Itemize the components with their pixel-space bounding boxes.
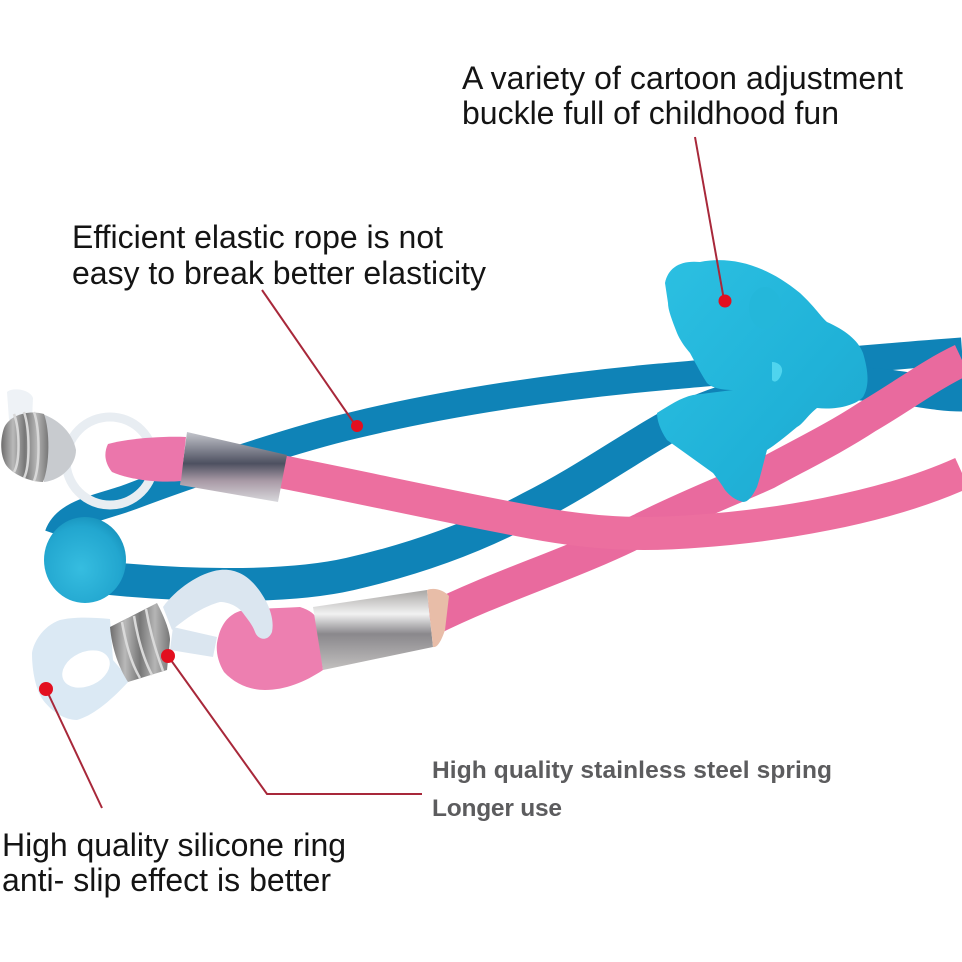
metal tube, lower: [313, 590, 433, 670]
steel spring, upper: [1, 389, 76, 482]
callout text: stainless steel spring: [432, 757, 832, 822]
pink rope end, upper: [105, 437, 186, 482]
callout text: stainless steel spring: High quality stainless steel spring: [432, 757, 832, 784]
leader line: elastic rope: [262, 290, 363, 432]
blue elastic rope, upper strand: [58, 351, 962, 535]
silicone ring hole: [56, 643, 116, 695]
turquoise bead: [44, 517, 126, 603]
dolphin adjustment buckle: [657, 260, 868, 502]
blue elastic rope, lower strand: [95, 384, 962, 585]
dolphin eye: [749, 287, 781, 329]
crimp band on pink rope: [427, 589, 449, 647]
silicone ring, lower: [32, 618, 130, 720]
metal tube, upper: [180, 432, 287, 502]
callout: stainless steel spring: [161, 649, 832, 822]
callout text: silicone ring: [2, 827, 346, 898]
callout text: elastic rope: Efficient elastic rope is not: [72, 219, 443, 255]
callout text: buckle: A variety of cartoon adjustment: [462, 60, 903, 96]
callout text: silicone ring: High quality silicone ring: [2, 827, 346, 863]
callout text: stainless steel spring: Longer use: [432, 795, 562, 822]
callout: silicone ring: [2, 682, 346, 898]
callout text: buckle: buckle full of childhood fun: [462, 95, 839, 131]
callout: buckle: [462, 60, 903, 308]
callout text: buckle: [462, 60, 903, 131]
silicone leg between spring and pink loop: [170, 627, 217, 657]
pink elastic rope, lower strand: [430, 360, 962, 620]
pink elastic rope, upper strand: [283, 472, 962, 533]
callout text: elastic rope: easy to break better elasticity: [72, 255, 486, 291]
leader line: silicone ring: [39, 682, 102, 808]
callout: elastic rope: [72, 219, 486, 432]
leader line: buckle: [695, 137, 732, 308]
silicone ring, upper: [66, 417, 154, 505]
leader line: spring: [161, 649, 422, 794]
callout text: elastic rope: [72, 219, 486, 291]
dolphin highlight: [772, 362, 782, 382]
steel spring, lower: [110, 603, 170, 682]
silicone ring arch, lower: [163, 570, 273, 639]
pink rope loop, lower: [217, 607, 323, 690]
callout text: silicone ring: anti- slip effect is better: [2, 862, 331, 898]
